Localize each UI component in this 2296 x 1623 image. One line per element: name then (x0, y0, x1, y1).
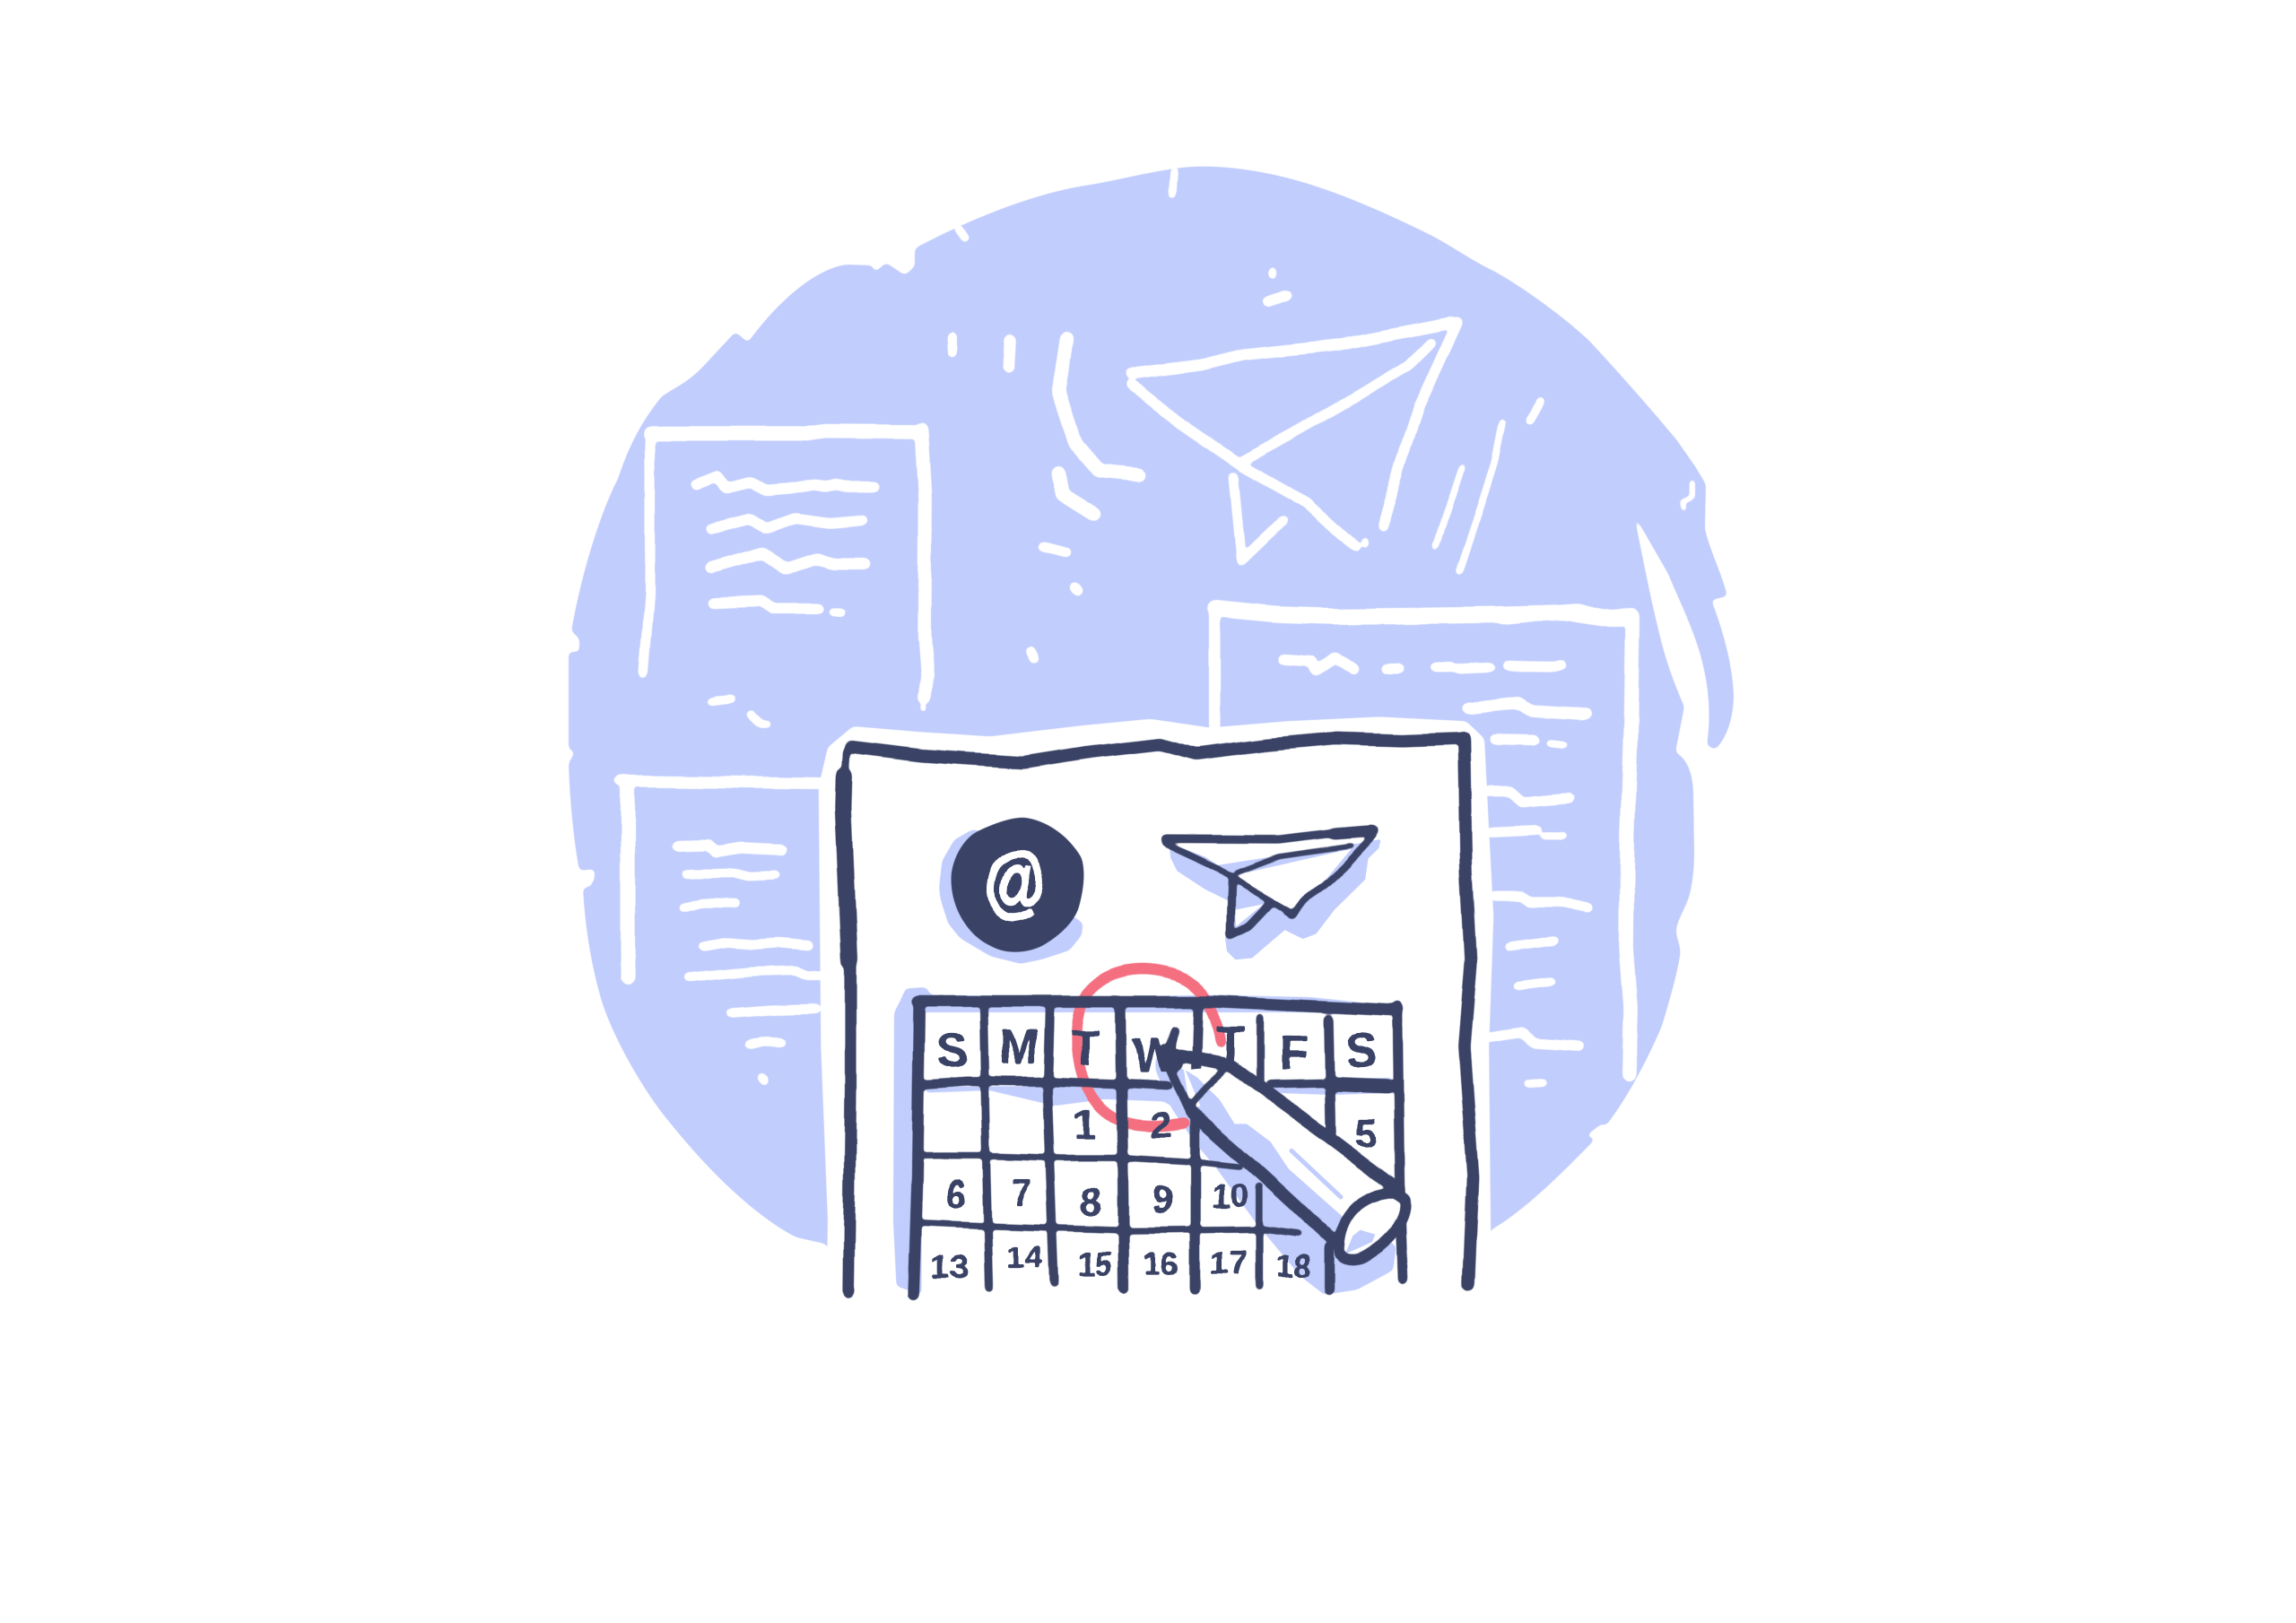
calendar grid (913, 1002, 1403, 1295)
pen highlight (1292, 1150, 1341, 1197)
pen strokes (1159, 1029, 1405, 1260)
weekday headers: S (1345, 1024, 1378, 1078)
document: lower left (621, 699, 823, 1081)
paper plane outline (1131, 323, 1457, 560)
pen body shading (1186, 1070, 1375, 1254)
calendar dates: 18 (1276, 1247, 1312, 1284)
calendar dates: 17 (1211, 1244, 1247, 1280)
calendar dates (932, 1104, 1377, 1285)
background blob (569, 167, 1734, 1255)
calendar shadow (893, 987, 1393, 1295)
calendar dates: 6 (945, 1173, 967, 1217)
calendar dates: 16 (1143, 1245, 1178, 1282)
document: right, text lines (1435, 611, 1632, 1083)
weekday headers: S (936, 1023, 969, 1077)
calendar dates: 15 (1077, 1245, 1113, 1282)
pen body (1184, 1065, 1406, 1258)
weekday headers: T (1216, 1017, 1245, 1071)
calendar frame (843, 738, 1473, 1293)
calendar dates: 2 (1150, 1104, 1171, 1148)
calendar dates: 9 (1152, 1177, 1174, 1221)
calendar dates: 10 (1213, 1178, 1248, 1215)
weekday headers: M (999, 1020, 1039, 1073)
pen shadow (1155, 1055, 1396, 1295)
background sketch: paper plane and document marks (621, 170, 1693, 1083)
motion lines and specks (713, 170, 1693, 725)
calendar dates: 7 (1011, 1171, 1032, 1215)
plane shadow (1171, 837, 1378, 958)
at-sign disc (951, 818, 1083, 952)
white card (819, 716, 1493, 1360)
calendar dates: 14 (1006, 1239, 1042, 1276)
at-sign icon (939, 818, 1083, 964)
at-sign shadow (939, 829, 1083, 964)
calendar dates: 8 (1080, 1179, 1101, 1223)
red hand-drawn circle (1077, 969, 1222, 1126)
calendar dates: 5 (1355, 1112, 1377, 1156)
weekday headers: F (1279, 1026, 1309, 1080)
at-sign glyph: @ (985, 836, 1046, 924)
weekday headers: W (1133, 1029, 1178, 1083)
document: upper left (644, 429, 927, 697)
calendar dates: 13 (932, 1248, 968, 1285)
calendar dates: 1 (1074, 1104, 1095, 1148)
plane strokes (1165, 830, 1376, 935)
weekday headers: T (1071, 1021, 1100, 1075)
pen (1159, 1029, 1406, 1260)
weekday headers (936, 1017, 1378, 1083)
paper plane icon (1165, 830, 1378, 958)
document: right (1215, 609, 1631, 727)
